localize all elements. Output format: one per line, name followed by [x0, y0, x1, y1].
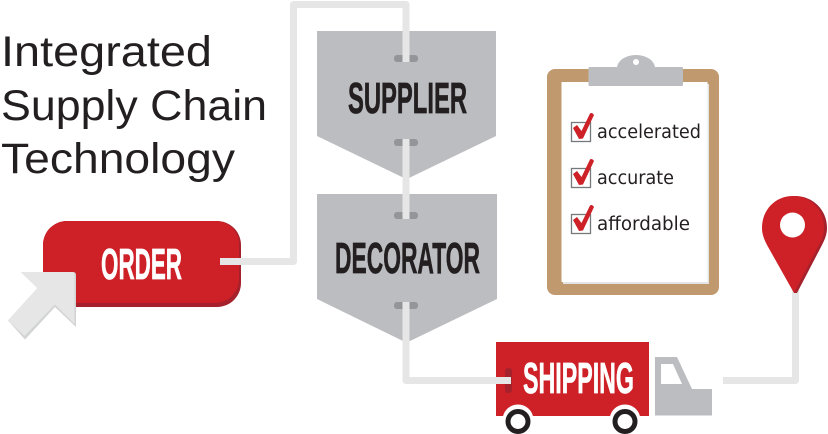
icon: location pin — [762, 196, 827, 293]
panel: order button — [43, 221, 241, 307]
shipping label: SHIPPING — [523, 354, 634, 403]
truck slot — [505, 368, 512, 393]
title: Technology — [1, 135, 236, 183]
connector: supplier to decorator — [402, 139, 410, 219]
title: Supply Chain — [1, 82, 267, 130]
connector: order to supplier — [220, 4, 406, 262]
paper — [563, 84, 709, 284]
decorator top slot — [394, 212, 418, 219]
checklist item: accurate — [572, 159, 674, 189]
truck cab — [655, 357, 712, 416]
wheel right — [610, 404, 640, 434]
panel: supplier — [317, 31, 496, 178]
checklist item: accurate: accurate — [597, 168, 674, 189]
connector: truck to pin — [723, 290, 796, 380]
supplier bottom slot — [394, 139, 418, 146]
checklist item: affordable — [572, 205, 690, 235]
title: Integrated — [1, 28, 212, 76]
wheel left — [502, 404, 534, 434]
connector: decorator to truck — [406, 302, 511, 380]
decorator bottom slot — [394, 302, 418, 309]
supplier top slot — [394, 55, 418, 62]
supplier label: SUPPLIER — [348, 74, 467, 123]
truck box — [496, 342, 649, 416]
panel: truck — [496, 342, 712, 434]
icon: cursor arrow — [8, 272, 76, 340]
title — [1, 28, 267, 183]
checklist item: accelerated: accelerated — [597, 122, 701, 143]
checklist item: accelerated — [572, 113, 701, 143]
order label: ORDER — [101, 240, 182, 289]
checklist item: affordable: affordable — [597, 214, 690, 235]
panel: decorator — [317, 194, 497, 341]
clip — [588, 55, 683, 86]
panel: clipboard — [547, 55, 719, 295]
decorator label: DECORATOR — [335, 234, 480, 283]
